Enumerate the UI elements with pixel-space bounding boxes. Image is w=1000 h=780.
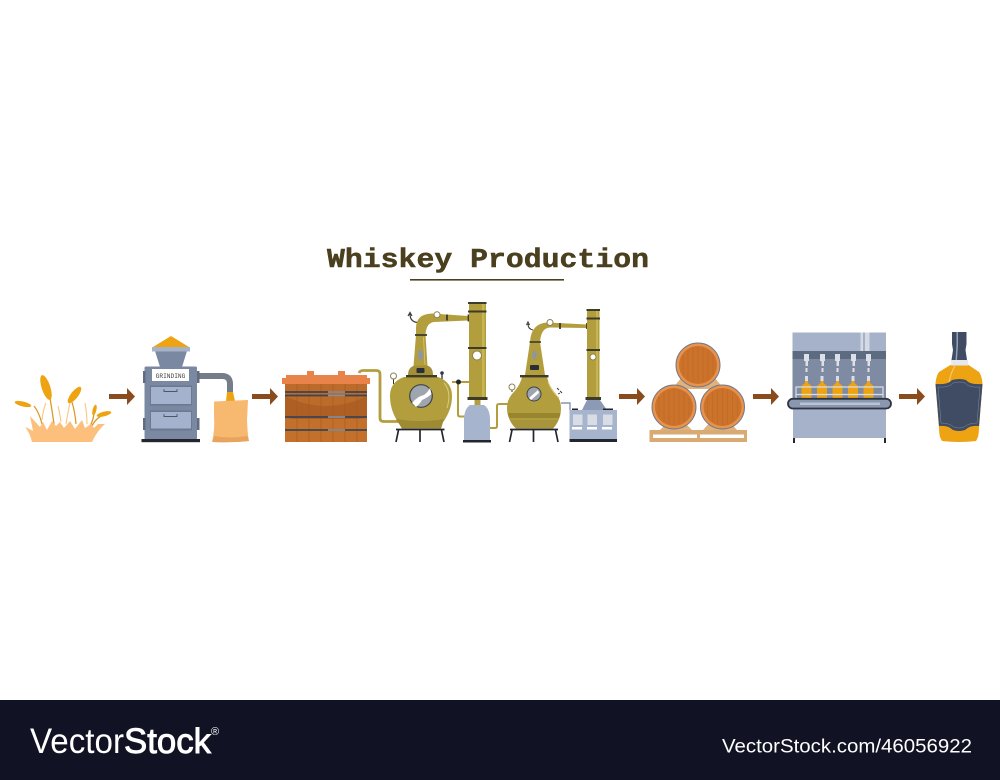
dome [408,366,433,375]
bottle label [936,379,982,431]
body [390,377,452,428]
label: grinding: GRINDING [156,373,186,380]
arrow 3 [619,388,645,405]
icon: whiskey bottle [936,332,982,442]
arrow 1 [109,388,135,405]
image id: VectorStock.com/46056922 [722,736,972,758]
conveyor [788,399,891,408]
logo wordmark: Vector [30,722,124,761]
drawers [150,386,192,430]
arrow 5 [899,388,925,405]
pipe to bag [197,376,230,392]
bands [285,392,367,430]
legs [510,430,558,442]
swan neck [530,322,587,342]
legs [396,430,444,442]
steam dots [557,388,562,394]
barrel right [700,385,744,429]
connecting pipes [452,382,508,428]
registered mark: ® [211,726,219,738]
window [410,385,432,407]
arrow 2 [252,388,278,405]
grain pile [153,336,189,347]
icon: first condenser column [463,302,491,442]
pipe [359,370,400,422]
spout [226,392,235,401]
hopper [155,351,187,367]
icon: bottling machine [788,332,891,443]
icon: wheat field [14,374,112,442]
vent pipe [408,312,418,322]
barrel left [652,385,696,429]
wheat ears [14,374,112,418]
bottles [802,381,874,398]
valve [441,373,443,380]
pallet [650,430,747,442]
title: Whiskey Production [327,246,649,276]
icon: grinding machine [142,336,249,442]
gauge [511,387,513,392]
grain sack [212,400,249,442]
body [507,377,561,428]
guard rail [796,387,883,398]
swan neck [416,314,468,335]
nozzles [804,354,871,372]
icon: stacked barrels on pallet [650,343,747,442]
vent pipe [526,322,533,330]
logo wordmark: Stock [124,722,211,761]
icon: fermentation vat [282,370,400,442]
receiver tanks [570,410,617,440]
feed pipe [561,403,570,410]
footer band [0,700,1000,780]
barrel top [676,343,720,387]
arrow 4 [753,388,779,405]
icon: second pot still [507,320,587,442]
icon: second column and receiver [570,309,617,442]
vat lid [282,371,370,384]
icon: first pot still [390,312,468,442]
machine body [144,366,197,440]
neck window [418,350,423,360]
gauge [390,373,396,384]
logo wordmark [30,722,211,761]
condenser bottle [464,405,490,440]
